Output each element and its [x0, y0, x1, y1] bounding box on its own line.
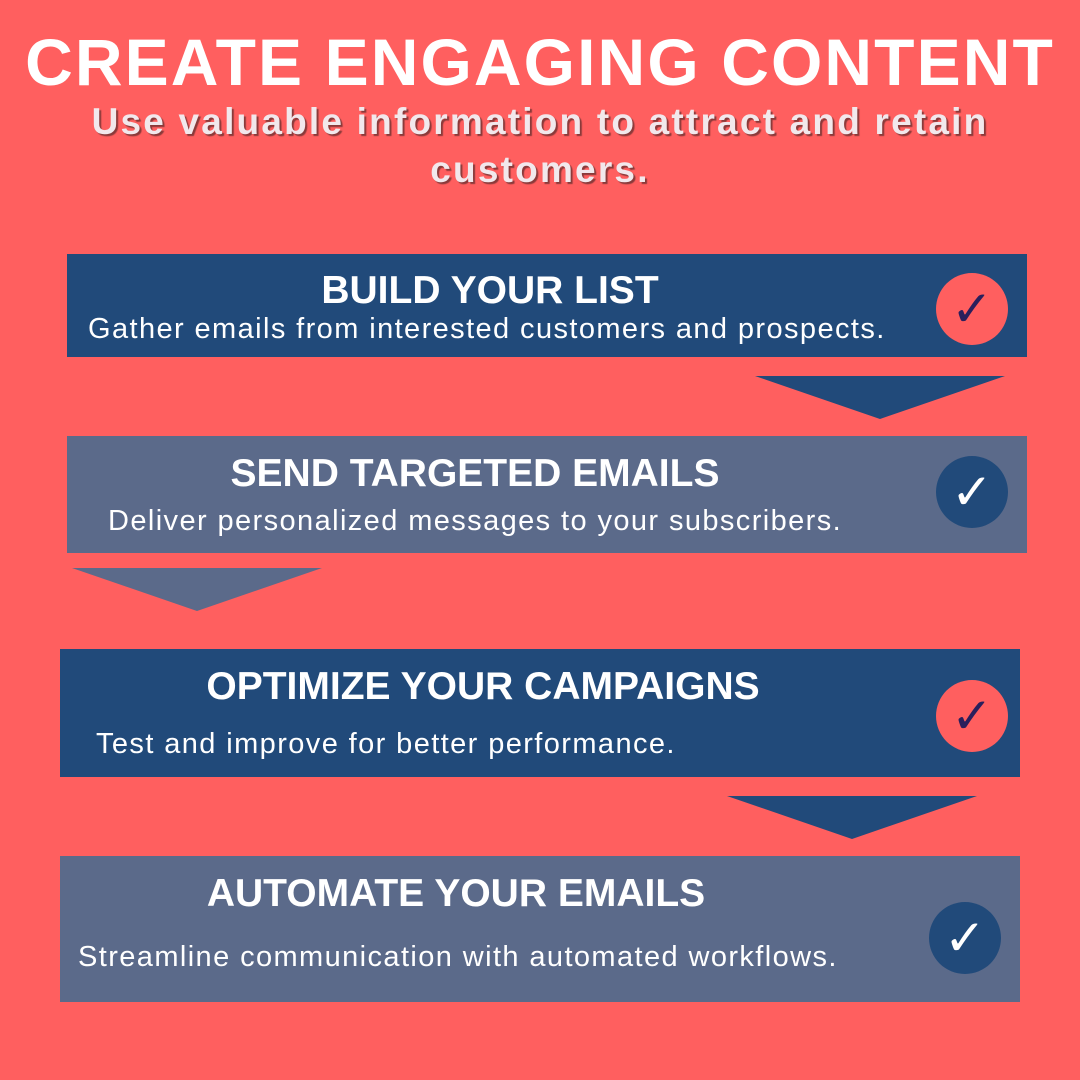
icon: check — [936, 680, 1008, 752]
panel: send targeted emails — [67, 436, 1027, 553]
text: send targeted emails: Deliver personalized messages to your subscribers. — [108, 505, 842, 537]
icon: check — [929, 902, 1001, 974]
panel: build your list — [67, 254, 1027, 357]
panel: automate your emails — [60, 856, 1020, 1002]
subtitle: Use valuable information to attract and retain customers. — [92, 101, 988, 190]
heading: build your list: BUILD YOUR LIST — [321, 269, 659, 312]
panel: optimize your campaigns — [60, 649, 1020, 777]
icon: check — [936, 456, 1008, 528]
heading: automate: AUTOMATE YOUR EMAILS — [207, 872, 705, 915]
icon: check: ✓ — [951, 463, 993, 521]
icon: check: ✓ — [951, 280, 993, 338]
icon: check: ✓ — [951, 687, 993, 745]
text: automate: Streamline communication with automated workflows. — [78, 941, 838, 973]
title: CREATE ENGAGING CONTENT — [25, 25, 1055, 99]
heading: send targeted emails: SEND TARGETED EMAILS — [231, 452, 719, 495]
icon: check: ✓ — [944, 909, 986, 967]
text: optimize: Test and improve for better performance. — [96, 728, 676, 760]
text: build your list: Gather emails from interested customers and prospects. — [88, 313, 886, 345]
heading: optimize: OPTIMIZE YOUR CAMPAIGNS — [206, 665, 760, 708]
icon: check — [936, 273, 1008, 345]
